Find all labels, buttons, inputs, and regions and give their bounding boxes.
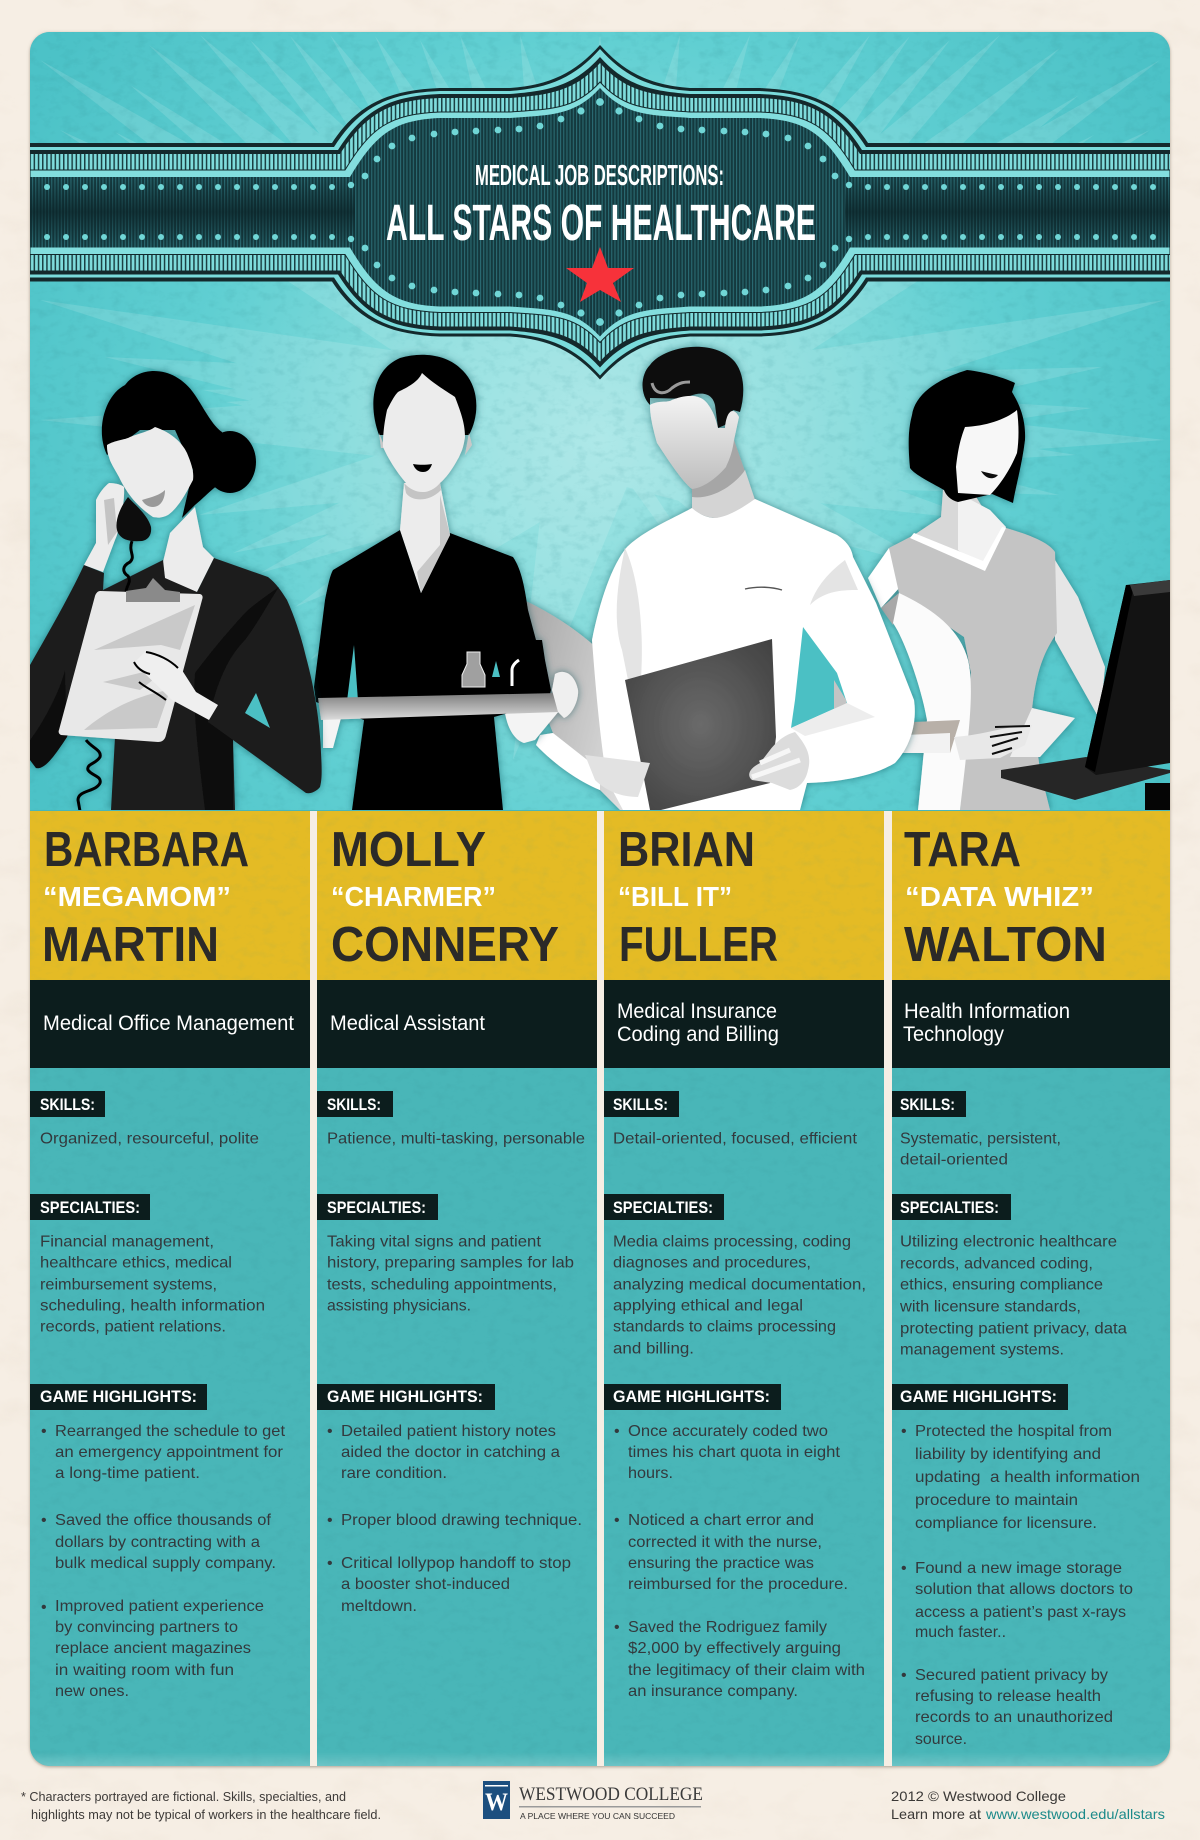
figure: Tara with monitor <box>868 370 1105 810</box>
figure: Barbara with phone <box>30 371 322 811</box>
text: specialties <box>613 1234 866 1358</box>
logo: Westwood College: A PLACE WHERE YOU CAN SUCCEED <box>520 1812 675 1821</box>
name: Barbara: MARTIN <box>42 918 219 972</box>
Molly face <box>383 373 465 492</box>
hero scene with sunburst <box>30 32 1170 811</box>
text: highlights: Once accurately coded two <box>628 1423 828 1440</box>
sunburst rays <box>40 35 1165 760</box>
text: highlights: much faster.. <box>915 1624 1006 1641</box>
text: specialties: applying ethical and legal <box>613 1298 803 1314</box>
text: highlights: refusing to release health <box>915 1688 1101 1705</box>
text: specialties: reimbursement systems, <box>40 1276 217 1294</box>
logo: Westwood College <box>483 1781 703 1821</box>
text: highlights: replace ancient magazines <box>55 1640 251 1657</box>
Molly teal slit <box>492 661 500 677</box>
text: specialties: standards to claims processing <box>613 1318 836 1336</box>
text: highlights: aided the doctor in catching a <box>341 1444 560 1461</box>
label: game highlights: GAME HIGHLIGHTS: <box>613 1387 770 1406</box>
text: highlights <box>614 1423 865 1700</box>
name: Tara: WALTON <box>904 918 1107 972</box>
job: Brian <box>617 1000 779 1046</box>
job: Brian: Medical Insurance <box>617 1000 777 1023</box>
Brian face <box>650 396 739 489</box>
Tara paper <box>1010 708 1075 757</box>
Tara right arm <box>1055 560 1105 720</box>
label: skills <box>604 1091 679 1117</box>
Tara white coat panel <box>893 593 971 810</box>
text: highlights: times his chart quota in eight <box>628 1444 841 1461</box>
Tara mouth <box>981 471 998 478</box>
text: highlights: Found a new image storage <box>915 1560 1122 1577</box>
name: Brian: “BILL IT” <box>618 881 732 912</box>
text: highlights: Rearranged the schedule to get <box>55 1423 286 1440</box>
text: highlights: new ones. <box>55 1683 129 1700</box>
text: highlights: Improved patient experience <box>55 1598 264 1615</box>
Barbara bun <box>204 431 256 493</box>
name: Molly: “CHARMER” <box>331 881 496 912</box>
text: specialties: management systems. <box>900 1342 1064 1358</box>
Brian folder <box>625 639 776 810</box>
label: skills: SKILLS: <box>900 1095 955 1114</box>
text: skills <box>900 1130 1061 1168</box>
banner title: MEDICAL JOB DESCRIPTIONS: <box>475 160 724 192</box>
Tara face <box>956 410 1018 495</box>
text: highlights: • <box>614 1619 620 1636</box>
text: highlights: rare condition. <box>341 1465 447 1482</box>
text: specialties: and billing. <box>613 1340 694 1358</box>
text: highlights: • <box>41 1423 47 1440</box>
Brian lower white sleeve <box>536 733 600 790</box>
text: specialties: history, preparing samples for lab <box>327 1254 574 1272</box>
name: Molly <box>331 823 559 972</box>
name: Brian <box>618 823 778 972</box>
Brian arm gap <box>791 627 847 728</box>
banner title <box>386 160 816 251</box>
text: highlights: an insurance company. <box>628 1683 798 1700</box>
text: specialties: scheduling, health information <box>40 1298 265 1314</box>
job: Tara <box>903 1000 1070 1046</box>
label: specialties: SPECIALTIES: <box>40 1198 140 1217</box>
name: Barbara: BARBARA <box>44 823 249 877</box>
label: game highlights: GAME HIGHLIGHTS: <box>40 1387 197 1406</box>
name: Molly: MOLLY <box>331 823 486 877</box>
text: highlights: • <box>41 1599 47 1616</box>
text: highlights: by convincing partners to <box>55 1619 238 1636</box>
text: highlights: hours. <box>628 1465 673 1482</box>
logo: Westwood College: W <box>485 1789 508 1816</box>
Tara cuff <box>911 716 960 753</box>
text: highlights: updating a health information <box>915 1469 1140 1486</box>
text: specialties: Financial management, <box>40 1234 214 1250</box>
monitor and desk <box>1001 580 1170 811</box>
Brian shirt <box>592 499 915 810</box>
Barbara hair <box>102 371 225 518</box>
Tara hand <box>954 727 1024 760</box>
marquee banner <box>30 45 1170 380</box>
text: highlights: • <box>614 1512 620 1529</box>
label: specialties <box>317 1194 438 1220</box>
text: highlights: meltdown. <box>341 1598 417 1615</box>
text: highlights: Saved the Rodriguez family <box>628 1619 827 1636</box>
text: specialties: Utilizing electronic healthcare <box>900 1234 1117 1250</box>
label: skills <box>30 1091 105 1117</box>
label: specialties: SPECIALTIES: <box>327 1198 426 1217</box>
job: Barbara: Medical Office Management <box>43 1012 294 1035</box>
text: specialties <box>899 1234 1127 1358</box>
text: highlights: access a patient’s past x-rays <box>915 1604 1126 1621</box>
label: specialties: SPECIALTIES: <box>613 1198 713 1217</box>
name: Tara: TARA <box>904 823 1021 877</box>
Barbara left sleeve <box>30 565 104 768</box>
text: highlights: Saved the office thousands of <box>55 1512 272 1529</box>
Barbara phone cord lower <box>78 740 100 811</box>
Molly dress <box>314 530 551 810</box>
Molly arm gap <box>347 645 358 701</box>
text: highlights: compliance for licensure. <box>915 1515 1097 1532</box>
Molly hand <box>552 672 578 718</box>
text: specialties: assisting physicians. <box>327 1298 471 1314</box>
monitor screen <box>1085 580 1170 775</box>
label: skills: SKILLS: <box>40 1095 95 1114</box>
text: highlights <box>41 1423 286 1700</box>
label: game highlights <box>30 1384 207 1410</box>
Barbara phone cord upper <box>124 541 132 592</box>
text: highlights: an emergency appointment for <box>55 1444 284 1461</box>
text: highlights: solution that allows doctors to <box>915 1581 1133 1598</box>
job: Brian: Coding and Billing <box>617 1023 779 1046</box>
text: specialties: Media claims processing, coding <box>613 1234 851 1250</box>
text: highlights: Protected the hospital from <box>915 1423 1112 1440</box>
Brian shirt shading <box>617 548 858 690</box>
label: specialties <box>30 1194 150 1220</box>
label: skills <box>317 1091 393 1117</box>
copyright and link <box>891 1788 1165 1822</box>
text: highlights: • <box>327 1555 333 1572</box>
text: highlights: Secured patient privacy by <box>915 1667 1108 1684</box>
Tara hair <box>909 370 1025 503</box>
text: highlights: • <box>327 1423 333 1440</box>
Molly arms below tray <box>323 711 559 748</box>
Barbara hand on clipboard <box>134 652 218 720</box>
figure: Brian with folder <box>524 347 915 810</box>
text: specialties <box>40 1234 265 1336</box>
text: specialties: records, patient relations. <box>40 1318 226 1336</box>
panel: Tara <box>892 823 1140 1748</box>
text: skills: Systematic, persistent, <box>900 1130 1061 1148</box>
name: Molly: CONNERY <box>331 918 559 972</box>
label: game highlights: GAME HIGHLIGHTS: <box>900 1387 1057 1406</box>
text: specialties: ethics, ensuring compliance <box>900 1276 1103 1294</box>
name: Brian: FULLER <box>619 918 778 972</box>
text: skills: Organized, resourceful, polite <box>40 1130 259 1148</box>
panel: Brian <box>604 823 866 1700</box>
footnote: highlights may not be typical of workers in the healthcare field. <box>31 1808 381 1822</box>
text: highlights: in waiting room with fun <box>55 1662 234 1679</box>
Barbara phone handset <box>116 497 151 541</box>
text: highlights <box>901 1423 1140 1748</box>
text: highlights: Noticed a chart error and <box>628 1512 814 1529</box>
name: Tara <box>904 823 1107 972</box>
text: highlights: reimbursed for the procedure. <box>628 1576 848 1593</box>
text: highlights: ensuring the practice was <box>628 1555 814 1572</box>
label: skills <box>892 1091 966 1117</box>
Barbara arm gap <box>245 693 270 728</box>
label: game highlights <box>892 1384 1068 1410</box>
text: highlights: a long-time patient. <box>55 1465 200 1482</box>
text: skills: detail-oriented <box>900 1152 1008 1168</box>
text: skills: Patience, multi-tasking, personable <box>327 1130 585 1148</box>
Tara left sleeve <box>868 548 900 608</box>
text: specialties: analyzing medical documentation, <box>613 1276 866 1294</box>
Barbara sleeve shade <box>30 670 67 768</box>
Barbara clipboard <box>59 578 203 742</box>
label: game highlights <box>604 1384 781 1410</box>
text: specialties: records, advanced coding, <box>900 1256 1093 1272</box>
text: highlights: corrected it with the nurse, <box>628 1534 822 1551</box>
text: specialties: protecting patient privacy, data <box>900 1320 1127 1338</box>
text: specialties <box>327 1234 574 1314</box>
name: Barbara <box>42 823 249 972</box>
name: Barbara: “MEGAMOM” <box>43 881 231 912</box>
Barbara face <box>107 427 193 518</box>
Molly bottle <box>462 652 485 687</box>
Brian hair curl <box>652 382 690 393</box>
text: highlights: • <box>901 1560 907 1577</box>
Barbara lips <box>142 490 165 507</box>
text: highlights: bulk medical supply company. <box>55 1555 276 1572</box>
Molly neck <box>400 483 450 593</box>
label: game highlights <box>317 1384 495 1410</box>
Barbara raised hand <box>84 483 124 572</box>
text: specialties: Taking vital signs and patient <box>327 1234 542 1250</box>
desk <box>1001 757 1170 800</box>
job: Tara: Technology <box>903 1023 1004 1046</box>
Brian neck <box>692 440 755 518</box>
logo: Westwood College: WESTWOOD COLLEGE <box>519 1784 703 1805</box>
panel: Barbara <box>30 823 294 1700</box>
text: highlights: source. <box>915 1731 967 1748</box>
Tara collar <box>910 527 1006 571</box>
label: specialties <box>892 1194 1011 1220</box>
panel: Molly <box>317 823 585 1615</box>
banner title: ALL STARS OF HEALTHCARE <box>386 194 816 251</box>
text: highlights: procedure to maintain <box>915 1492 1078 1509</box>
column blocks <box>30 811 1170 1771</box>
job: Tara: Health Information <box>904 1000 1070 1023</box>
text: highlights: the legitimacy of their claim with <box>628 1662 865 1679</box>
text: skills: Detail-oriented, focused, efficient <box>613 1130 858 1148</box>
Molly mouth <box>413 464 432 472</box>
text: highlights: • <box>614 1423 620 1440</box>
Brian left hand <box>585 755 650 797</box>
text: highlights: • <box>901 1423 907 1440</box>
icon: red star <box>566 247 634 302</box>
Brian collar wrinkle <box>745 587 782 590</box>
footnote <box>21 1790 381 1822</box>
text: specialties: healthcare ethics, medical <box>40 1254 232 1272</box>
label: specialties <box>604 1194 724 1220</box>
text: highlights: $2,000 by effectively arguing <box>628 1640 841 1657</box>
Molly hair <box>373 355 476 435</box>
text: highlights: liability by identifying and <box>915 1446 1101 1463</box>
figure: Molly with tray <box>314 355 578 810</box>
text: highlights: • <box>901 1667 907 1684</box>
text: specialties: tests, scheduling appointments, <box>327 1276 557 1294</box>
label: specialties: SPECIALTIES: <box>900 1198 999 1217</box>
Barbara jacket <box>103 558 322 810</box>
name: Tara: “DATA WHIZ” <box>905 881 1094 912</box>
label: game highlights: GAME HIGHLIGHTS: <box>327 1387 483 1406</box>
text: highlights: Detailed patient history notes <box>341 1423 556 1440</box>
Brian right hand <box>749 732 809 790</box>
text: highlights: records to an unauthorized <box>915 1709 1113 1726</box>
job: Molly: Medical Assistant <box>330 1012 485 1035</box>
text: highlights: • <box>327 1512 333 1529</box>
Brian grey sleeve <box>526 598 623 810</box>
Barbara jacket dark fold <box>194 587 279 810</box>
text: highlights: • <box>41 1512 47 1529</box>
Brian hair <box>642 347 743 428</box>
Molly jug handle <box>512 660 519 686</box>
label: skills: SKILLS: <box>327 1095 381 1114</box>
text: highlights: Proper blood drawing technique. <box>341 1512 582 1529</box>
Barbara neck <box>163 507 214 592</box>
text: highlights <box>327 1423 582 1615</box>
name: Brian: BRIAN <box>618 823 755 877</box>
copyright and link: www.westwood.edu/allstars <box>985 1806 1165 1822</box>
Molly ears <box>379 433 472 455</box>
monitor top <box>1130 580 1170 596</box>
footnote: * Characters portrayed are fictional. Skills, specialties, and <box>21 1790 346 1804</box>
text: specialties: diagnoses and procedures, <box>613 1254 811 1272</box>
text: highlights: Critical lollypop handoff to stop <box>341 1555 571 1572</box>
Tara torso <box>889 528 1057 810</box>
Molly tray <box>318 693 559 720</box>
text: highlights: dollars by contracting with a <box>55 1534 260 1551</box>
text: specialties: with licensure standards, <box>899 1298 1081 1316</box>
copyright and link: Learn more at <box>891 1806 981 1822</box>
label: skills: SKILLS: <box>613 1095 668 1114</box>
text: highlights: a booster shot-induced <box>341 1576 510 1593</box>
copyright and link: 2012 © Westwood College <box>891 1788 1066 1804</box>
desk leg <box>1145 783 1170 811</box>
Tara neck <box>914 486 1006 552</box>
